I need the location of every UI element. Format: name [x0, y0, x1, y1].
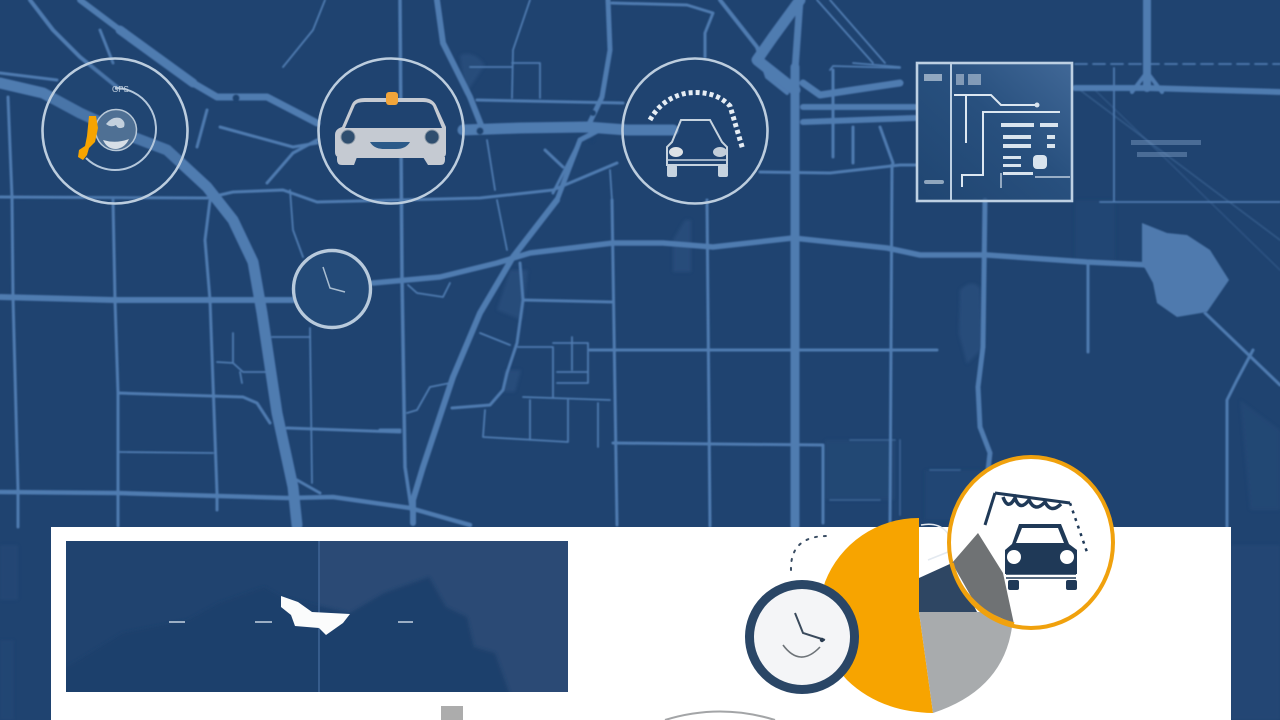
icon: car wash badge	[949, 457, 1113, 628]
icon: GPS location circle	[42, 58, 188, 204]
icon: clock badge	[750, 584, 854, 690]
bar stub	[441, 706, 463, 720]
icon: car wash circle	[622, 58, 768, 204]
gauge arc stub	[665, 712, 775, 720]
pie chart	[820, 518, 1012, 713]
panel: white lower panel	[51, 527, 1231, 720]
road network	[0, 0, 1280, 527]
faint label marks	[1131, 140, 1201, 157]
inset map with silhouette	[60, 541, 568, 700]
lake	[1142, 223, 1229, 317]
icon: car front view	[318, 58, 464, 204]
icon: GPS location circle: GPS	[112, 85, 129, 94]
icon: route map panel	[917, 63, 1072, 201]
dotted arc	[791, 536, 830, 570]
icon: clock on map	[294, 250, 370, 328]
